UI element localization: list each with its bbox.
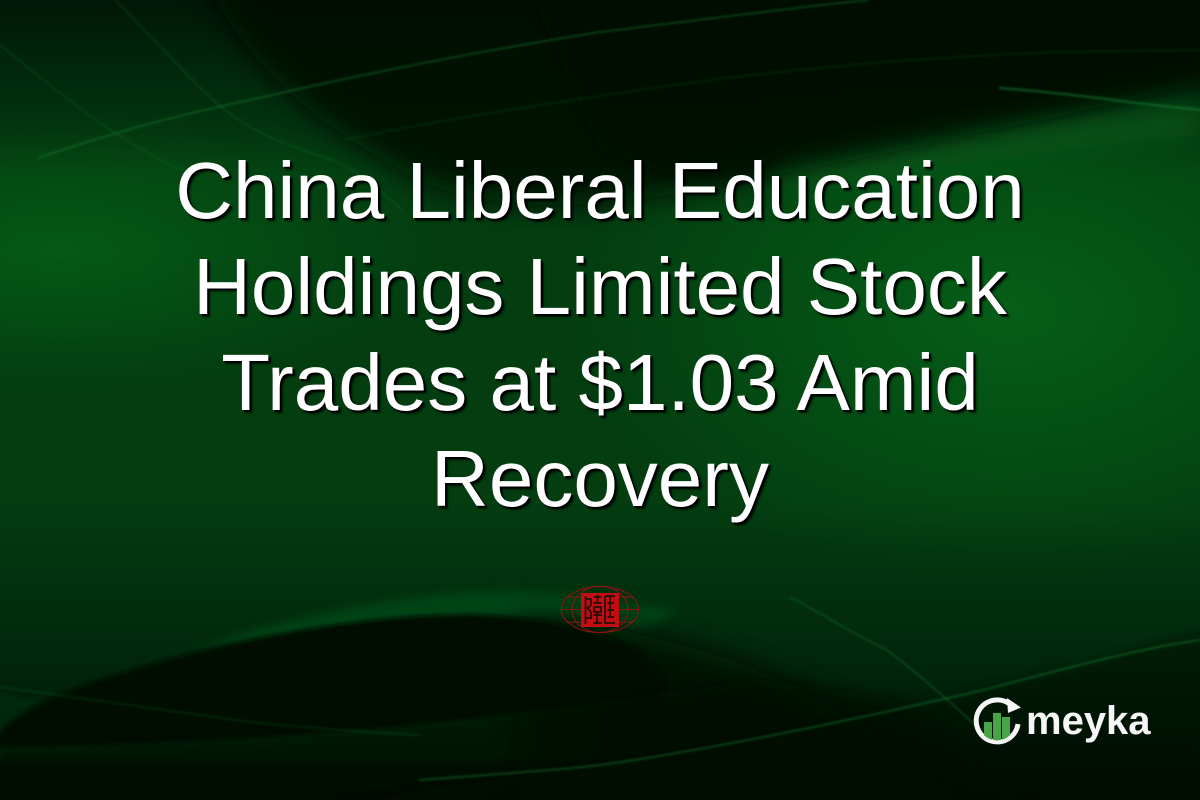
- soft right side of the dark hump: [520, 618, 980, 800]
- sharp left side of the dark hump: [0, 615, 665, 747]
- icon: company seal logo: [561, 586, 639, 633]
- icon: meyka chart ring: [974, 697, 1021, 744]
- logo: meyka: [974, 697, 1151, 744]
- logo wordmark: meyka: [1026, 699, 1151, 743]
- title: China Liberal Education Holdings Limited Stock Trades at $1.03 Amid Recovery: [175, 146, 1025, 523]
